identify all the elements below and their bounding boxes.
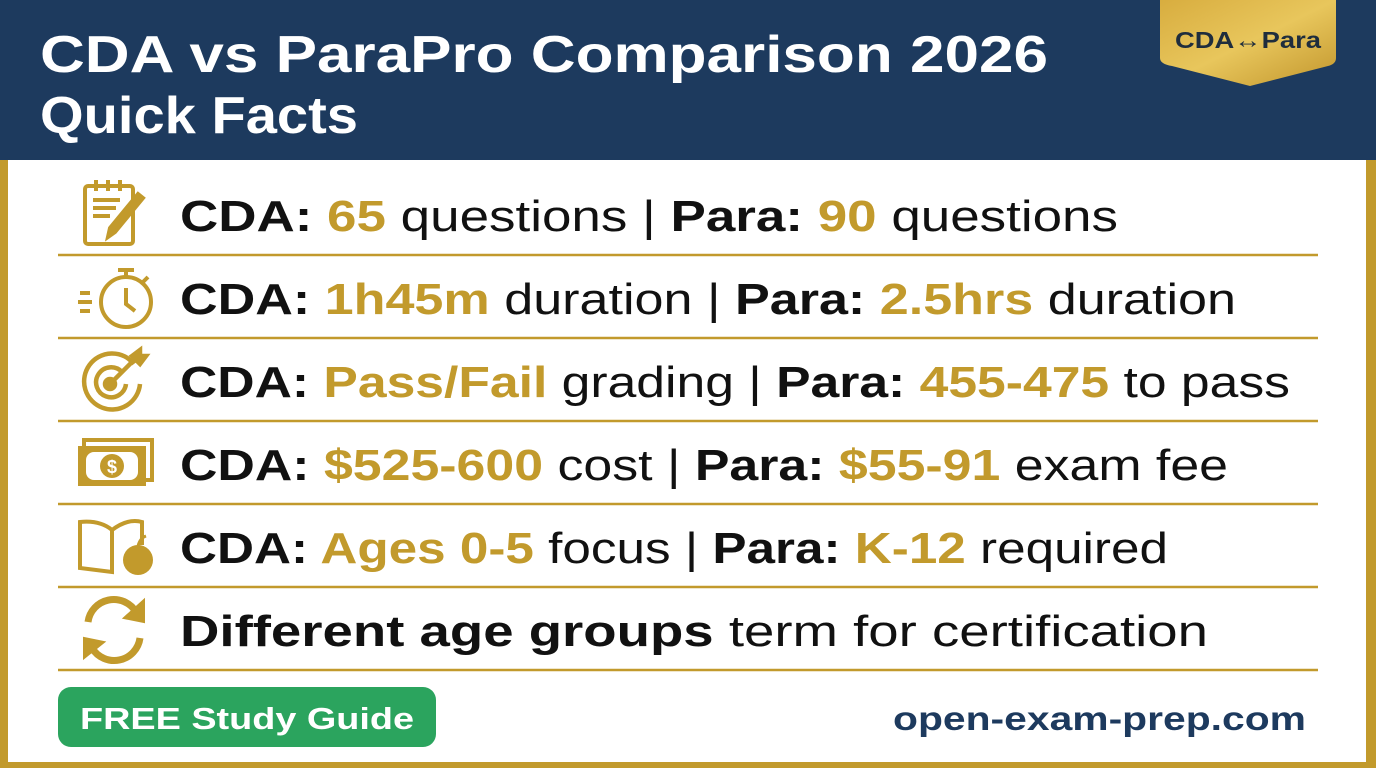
row: cost: CDA: $525-600 cost | Para: $55-91 exam fee — [180, 441, 1228, 490]
button: free study guide: FREE Study Guide — [80, 701, 414, 736]
icon: book and apple — [80, 521, 153, 575]
icon: refresh arrows — [84, 599, 144, 661]
icon: money: $ — [107, 457, 117, 477]
row: questions: CDA: 65 questions | Para: 90 questions — [180, 192, 1118, 241]
icon: target — [84, 350, 146, 409]
row: ages: CDA: Ages 0-5 focus | Para: K-12 required — [180, 524, 1168, 573]
dividers — [58, 255, 1318, 670]
button: free study guide — [58, 687, 436, 747]
rows text — [180, 192, 1290, 656]
row: summary: Different age groups term for certification — [180, 607, 1208, 656]
header band — [0, 0, 1376, 160]
icon: stopwatch — [78, 270, 151, 327]
icon: notepad — [85, 180, 143, 244]
badge: CDA↔Para — [1175, 27, 1321, 53]
url: open-exam-prep.com — [893, 700, 1306, 737]
badge — [1160, 0, 1336, 86]
title: CDA vs ParaPro Comparison 2026 — [40, 26, 1048, 84]
title — [40, 26, 1048, 145]
row: duration: CDA: 1h45m duration | Para: 2.5hrs duration — [180, 275, 1236, 324]
title: Quick Facts — [40, 87, 358, 145]
row: grading: CDA: Pass/Fail grading | Para: 455-475 to pass — [180, 358, 1290, 407]
icon: money — [78, 440, 152, 486]
